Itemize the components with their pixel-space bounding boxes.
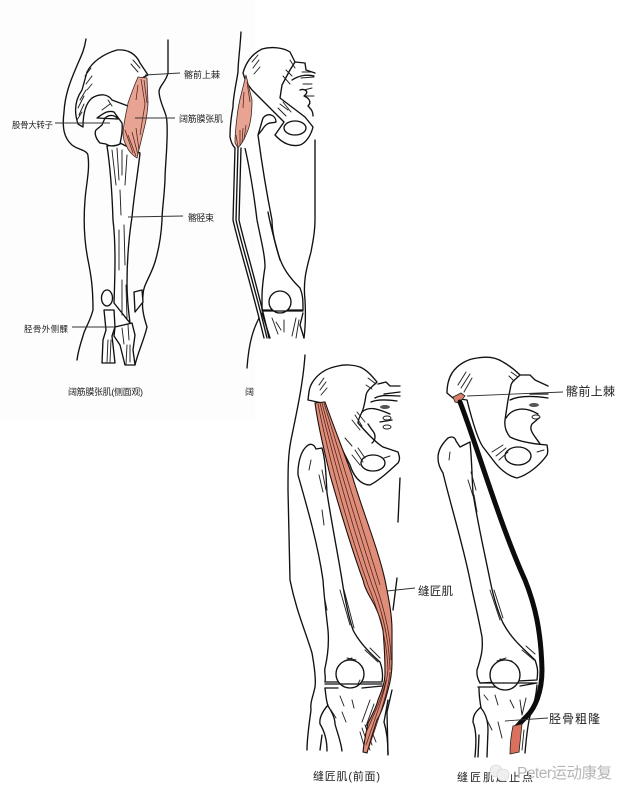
bone: femur: [298, 444, 383, 682]
figure: sartorius anterior view: [288, 355, 454, 783]
bone: pelvis: [308, 365, 400, 485]
icon: chat bubbles: [490, 765, 509, 781]
muscle: tensor fasciae latae medial: [235, 75, 252, 148]
bone: tibia and fibula: [473, 683, 537, 757]
label: greater trochanter: 股骨大转子: [12, 120, 53, 130]
label: lateral tibial condyle: 胫骨外侧髁: [24, 324, 68, 334]
label: anterior superior iliac spine: 髂前上棘: [184, 69, 220, 80]
label: greater trochanter: [12, 120, 110, 130]
bone: knee and lower leg: [102, 290, 143, 365]
caption: sartorius anterior: 缝匠肌(前面): [313, 769, 380, 783]
line: sartorius course: [460, 402, 542, 729]
muscle: sartorius: [315, 402, 392, 753]
caption: sartorius origin and insertion: 缝匠肌起止点: [457, 770, 533, 784]
bone: pelvis: [243, 48, 315, 146]
figure: sartorius origin and insertion: [438, 357, 615, 784]
caption: medial view cut off: 阔: [245, 386, 254, 397]
label: tibial tuberosity: 胫骨粗隆: [549, 711, 600, 726]
bone: femur: [438, 437, 538, 683]
watermark: Peter运动康复: [517, 764, 612, 782]
label: tibial tuberosity: [505, 711, 600, 726]
figure: tensor fasciae latae medial view: [230, 32, 315, 397]
label: sartorius: [387, 584, 454, 598]
muscle: tensor fasciae latae: [123, 77, 148, 158]
bone: pelvis: [447, 357, 548, 478]
insertion: tibial tuberosity: [510, 724, 522, 754]
label: tensor fasciae latae: [135, 113, 223, 124]
origin: anterior superior iliac spine: [453, 393, 465, 403]
bone: ilium: [76, 50, 148, 127]
label: iliotibial tract: [128, 212, 214, 223]
figure: tensor fasciae latae lateral view: [12, 39, 223, 397]
bone: tibia and fibula: [320, 684, 388, 754]
label: sartorius: 缝匠肌: [418, 584, 454, 598]
iliotibial tract band: [233, 148, 269, 338]
bone: femur: [245, 115, 303, 313]
bone: patella: [490, 658, 520, 690]
label: lateral tibial condyle: [24, 324, 115, 334]
label: anterior superior iliac spine: [467, 384, 615, 398]
bone: patella: [336, 658, 364, 688]
label: anterior superior iliac spine: [145, 69, 220, 80]
bone: tibia top: [262, 313, 304, 338]
caption: lateral view: 阔筋膜张肌(侧面观): [68, 386, 143, 397]
label: anterior superior iliac spine: 髂前上棘: [566, 384, 615, 398]
label: iliotibial tract: 髂胫束: [188, 212, 214, 223]
label: tensor fasciae latae: 阔筋膜张肌: [179, 113, 223, 124]
bone: femur shaft and trochanter: [95, 111, 140, 323]
